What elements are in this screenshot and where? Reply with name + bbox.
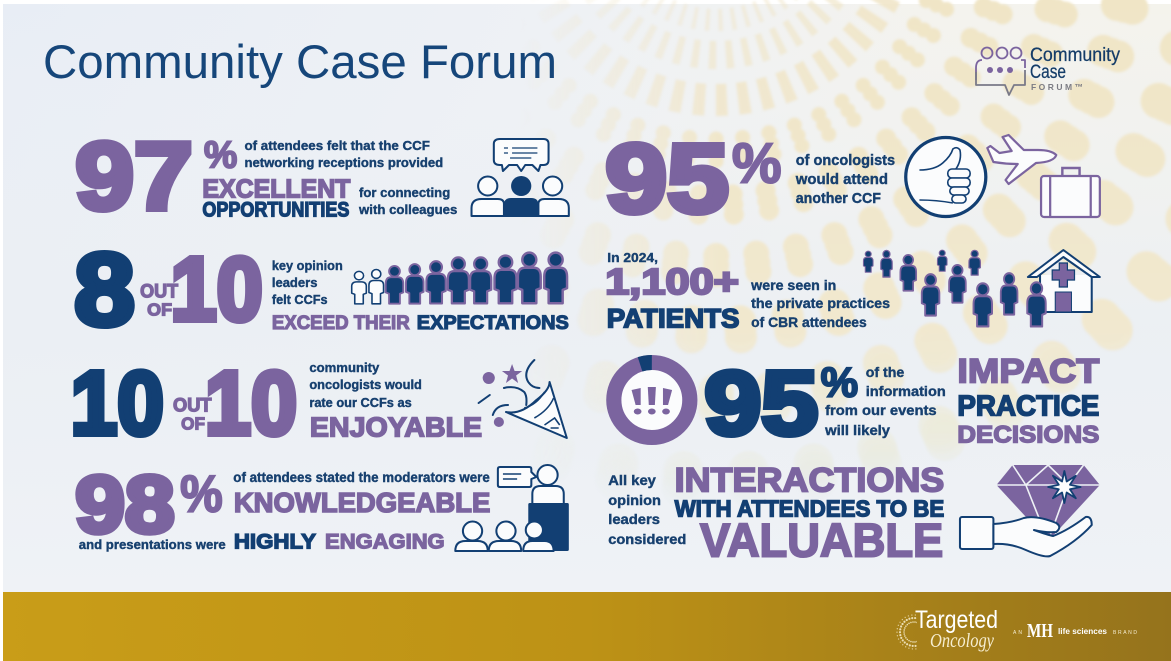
- text: connecting with colleagues: [358, 185, 457, 217]
- stat: percent: %: [821, 359, 858, 405]
- icon: party popper: [479, 360, 567, 438]
- highlight: interactions: INTERACTIONS: [675, 462, 944, 499]
- label: out of: [173, 396, 212, 433]
- text: private practices: of CBR attendees: [751, 314, 867, 330]
- stat: 10: 10: [170, 240, 263, 340]
- text: private practices: were seen in: [750, 277, 836, 293]
- panel: valuable interactions: [608, 462, 1100, 567]
- logo: Targeted Oncology: Oncology: [930, 630, 994, 652]
- highlight: with attendees to be: WITH ATTENDEES TO BE: [675, 497, 944, 522]
- logo: MJH life sciences: [1013, 620, 1137, 642]
- highlight: impact practice decisions: PRACTICE: [957, 391, 1099, 422]
- stat: percent: %: [180, 466, 223, 523]
- text: community oncologists: [309, 360, 422, 410]
- icon: airplane: [987, 135, 1056, 184]
- text: attendees felt: [244, 138, 443, 170]
- text: key opinion leaders: felt CCFs: [272, 292, 328, 307]
- text: community oncologists: community: [309, 360, 380, 375]
- text: oncologists attend: [795, 153, 895, 207]
- highlight: impact practice decisions: [957, 353, 1099, 448]
- highlight: enjoyable: ENJOYABLE: [310, 411, 482, 442]
- highlight: exceed their expectations: EXCEED THEIR: [272, 312, 410, 334]
- icon: thumbs up: [906, 138, 986, 216]
- text: oncologists attend: another CCF: [796, 191, 881, 207]
- stat: 95: 95: [705, 354, 818, 454]
- icon: ten people row: [352, 253, 567, 304]
- logo: Targeted Oncology: Targeted: [915, 606, 998, 634]
- highlight: exceed their expectations: [272, 312, 569, 334]
- text: connecting with colleagues: with colleagues: [358, 202, 457, 217]
- label: out of: OF: [181, 414, 205, 433]
- panel: 98% moderators: [75, 459, 569, 553]
- highlight: excellent opportunities: OPPORTUNITIES: [202, 199, 349, 221]
- footer band: [3, 592, 1171, 661]
- highlight: highly engaging: [234, 531, 445, 553]
- text: key opinion leaders: leaders: [272, 275, 317, 290]
- text: oncologists attend: would attend: [795, 172, 888, 188]
- stat: 8: 8: [74, 232, 135, 347]
- logo: Community Case Forum: FORUM™: [1031, 82, 1083, 92]
- stat: percent: %: [204, 134, 237, 176]
- highlight: highly engaging: ENGAGING: [325, 531, 445, 553]
- panel: 1,100+ patients: [605, 250, 1100, 333]
- logo: Community Case Forum: Case: [1030, 62, 1066, 83]
- highlight: excellent opportunities: [202, 174, 350, 221]
- label: out of: OUT: [173, 396, 212, 416]
- highlight: exceed their expectations: EXPECTATIONS: [417, 312, 569, 334]
- logo: Community Case Forum: [976, 45, 1120, 95]
- text: community oncologists: rate our CCFs as: [309, 395, 412, 410]
- highlight: highly engaging: HIGHLY: [234, 531, 316, 553]
- text: in 2024: In 2024,: [607, 250, 658, 265]
- background dot burst: [554, 0, 1171, 488]
- highlight: excellent opportunities: EXCELLENT: [202, 174, 350, 203]
- logo: MJH life sciences: life sciences: [1058, 626, 1107, 636]
- text: information: information: [866, 383, 946, 399]
- panel: 10 out of 10: [71, 354, 567, 454]
- highlight: impact practice decisions: IMPACT: [957, 353, 1099, 390]
- text: key opinion leaders: opinion: [608, 493, 661, 508]
- logo: Community Case Forum: Community: [1030, 45, 1120, 66]
- title: Community Case Forum: [43, 35, 557, 88]
- stat: 98: 98: [75, 459, 175, 550]
- icon: clinic house: [1028, 250, 1100, 312]
- icon: presenter at podium with audience: [455, 465, 569, 551]
- text: attendees felt: of attendees felt that the CCF: [244, 138, 430, 153]
- text: attendees felt: networking receptions provided: [244, 155, 443, 170]
- highlight: patients: PATIENTS: [607, 304, 740, 333]
- text: private practices: the private practices: [751, 295, 890, 311]
- text: oncologists attend: of oncologists: [796, 153, 895, 169]
- panel: 97% networking: [75, 124, 569, 230]
- text: community oncologists: oncologists would: [309, 377, 422, 392]
- highlight: valuable: VALUABLE: [700, 515, 943, 567]
- icon: patient entering: [1027, 282, 1046, 326]
- logo: MJH life sciences: MH: [1027, 620, 1053, 642]
- text: key opinion leaders: leaders: [608, 512, 660, 527]
- panel: 95% impact: [614, 353, 1099, 454]
- text: key opinion leaders: key opinion: [272, 258, 343, 273]
- icon: suitcase: [1041, 168, 1100, 217]
- stat: 97: 97: [75, 124, 193, 230]
- text: connecting with colleagues: for connecting: [359, 185, 450, 200]
- text: private practices: [750, 277, 890, 330]
- chart: donut 95 percent: [614, 362, 690, 438]
- label: out of: OF: [147, 300, 172, 319]
- icon: sunburst: [896, 614, 917, 650]
- text: information: from our events: [825, 402, 937, 418]
- stat: 10 navy: 10: [71, 354, 164, 454]
- text: attendees stated: of attendees stated the moderators were: [233, 470, 490, 485]
- icon: crowd of patients: [863, 250, 1017, 326]
- text: key opinion leaders: [272, 258, 343, 307]
- panel: 8 out of 10: [74, 232, 569, 347]
- icon: diamond in hand: [960, 465, 1100, 556]
- label: out of: [140, 281, 178, 319]
- label: out of: OUT: [140, 281, 178, 302]
- highlight: impact practice decisions: DECISIONS: [957, 422, 1099, 448]
- stat: 1,100+: 1,100+: [605, 261, 739, 302]
- logo: MJH life sciences: AN: [1013, 630, 1022, 636]
- text: key opinion leaders: All key: [608, 473, 656, 488]
- icon: people speech bubble: [976, 48, 1025, 95]
- text: information: will likely: [824, 422, 890, 438]
- stat: percent: %: [732, 132, 782, 195]
- stat: 95: 95: [605, 125, 729, 233]
- panel: 95% would attend: [605, 125, 1100, 233]
- highlight: knowledgeable: KNOWLEDGEABLE: [234, 486, 490, 518]
- text: presentations: and presentations were: [79, 537, 226, 552]
- stat: 10 purple: 10: [205, 354, 297, 454]
- logo: Targeted Oncology: [897, 606, 998, 652]
- text: key opinion leaders: [608, 473, 686, 547]
- text: information: [824, 364, 946, 438]
- text: information: of the: [866, 364, 904, 380]
- text: key opinion leaders: considered: [608, 532, 686, 547]
- logo: MJH life sciences: BRAND: [1113, 630, 1137, 636]
- icon: three people with speech bubble: [472, 139, 569, 217]
